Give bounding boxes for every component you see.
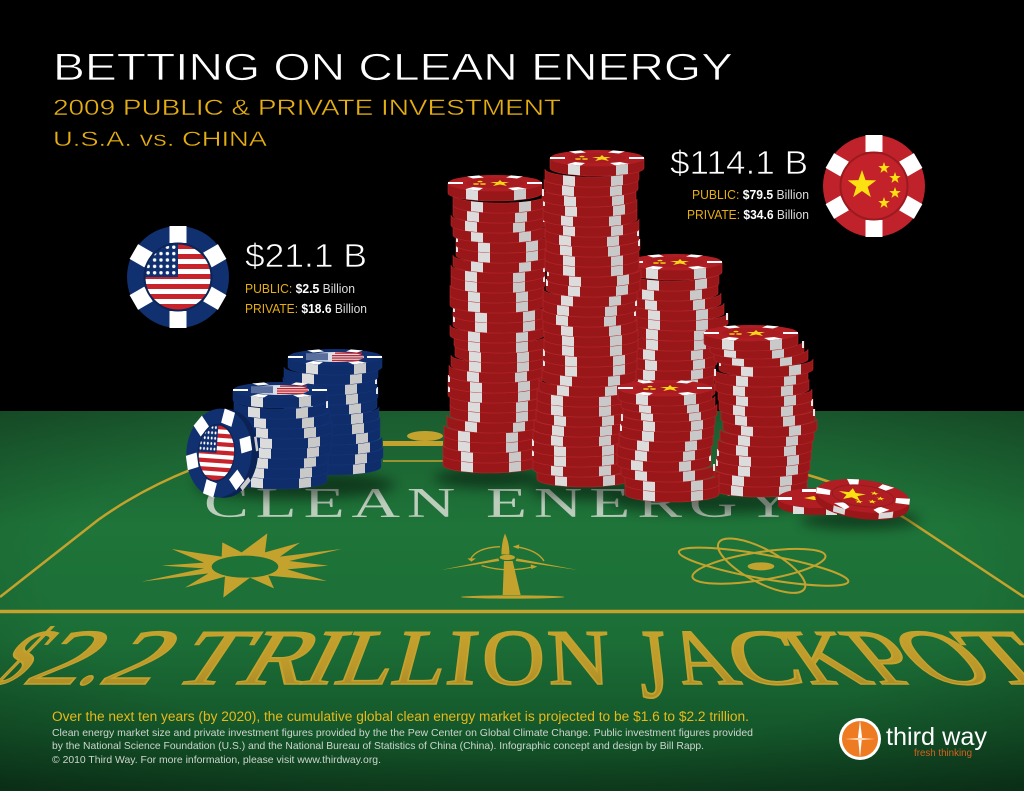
jackpot headline: L [384, 614, 461, 702]
logo: third way: fresh thinking [914, 748, 972, 759]
jackpot headline: T [155, 614, 276, 701]
jackpot headline: . [60, 614, 149, 702]
subtitle: versus: U.S.A. vs. CHINA [53, 128, 267, 151]
USA total: $21.1 B [245, 237, 367, 274]
icon: leaning USA chip [177, 397, 264, 509]
USA public investment: PUBLIC: $2.5 Billion [245, 282, 355, 296]
China total: $114.1 B [670, 144, 808, 181]
jackpot headline: I [288, 615, 364, 702]
icon: compass [839, 718, 881, 760]
lying chip: back [778, 488, 858, 515]
icon: atom [677, 528, 850, 603]
subtitle: 2009 PUBLIC & PRIVATE INVESTMENT [53, 95, 561, 120]
icon: China poker chip [823, 135, 925, 237]
jackpot headline: P [820, 613, 945, 701]
China public investment: PUBLIC: $79.5 Billion [692, 188, 809, 202]
jackpot headline: C [715, 614, 814, 702]
logo: third way [839, 718, 987, 760]
footer headline text: Over the next ten years (by 2020), the cumulative global clean energy market is projected to be $1.6 to $2.2 trillion. [52, 709, 749, 724]
red chip stack: tallest [532, 150, 644, 487]
red chip stack: far left [443, 175, 550, 473]
red chip stack: front [617, 380, 719, 502]
title: BETTING ON CLEAN ENERGY [53, 47, 733, 89]
black background [0, 0, 1024, 411]
blue chip stack: back [283, 349, 383, 475]
stack shadows [195, 468, 920, 529]
icon: USA poker chip [127, 226, 229, 328]
jackpot headline: 2 [4, 614, 137, 702]
red chip stack: back right [620, 254, 728, 401]
jackpot headline: N [545, 615, 612, 702]
jackpot headline: A [649, 615, 752, 702]
table text: clean energy: CLEAN ENERGY [204, 480, 793, 527]
China private investment: PRIVATE: $34.6 Billion [687, 208, 809, 222]
panel: USA totals [127, 226, 367, 328]
jackpot headline [0, 610, 1024, 719]
felt gold emblem behind stacks [383, 431, 443, 446]
footer credits: by the National Science Foundation (U.S.) and the National Bureau of Statistics of China (China). Infographic concept and design by Bill Rapp. [52, 740, 704, 752]
green felt table [0, 411, 1024, 791]
jackpot headline: I [442, 614, 484, 702]
red chip stack: right [704, 325, 817, 497]
icon: wind turbine [441, 533, 578, 599]
panel: China totals [670, 135, 925, 237]
lying chip: front [814, 474, 912, 525]
jackpot headline: O [482, 615, 545, 702]
jackpot headline: L [325, 614, 415, 701]
footer credits: © 2010 Third Way. For more information, please visit www.thirdway.org. [52, 754, 381, 766]
blue chip stack: front [233, 382, 332, 489]
table gold lines [0, 461, 1024, 612]
footer credits: Clean energy market size and private investment figures provided by the the Pew Center on Global Climate Change. Public investment figures provided [52, 727, 753, 739]
USA private investment: PRIVATE: $18.6 Billion [245, 302, 367, 316]
jackpot headline: R [222, 614, 344, 701]
footer credits [52, 727, 753, 766]
jackpot headline: K [761, 614, 889, 702]
jackpot headline: J [631, 610, 675, 719]
logo: third way: third way [886, 723, 987, 751]
jackpot headline: O [868, 615, 1018, 702]
jackpot headline: 2 [83, 614, 204, 702]
icon: sun [142, 533, 342, 598]
